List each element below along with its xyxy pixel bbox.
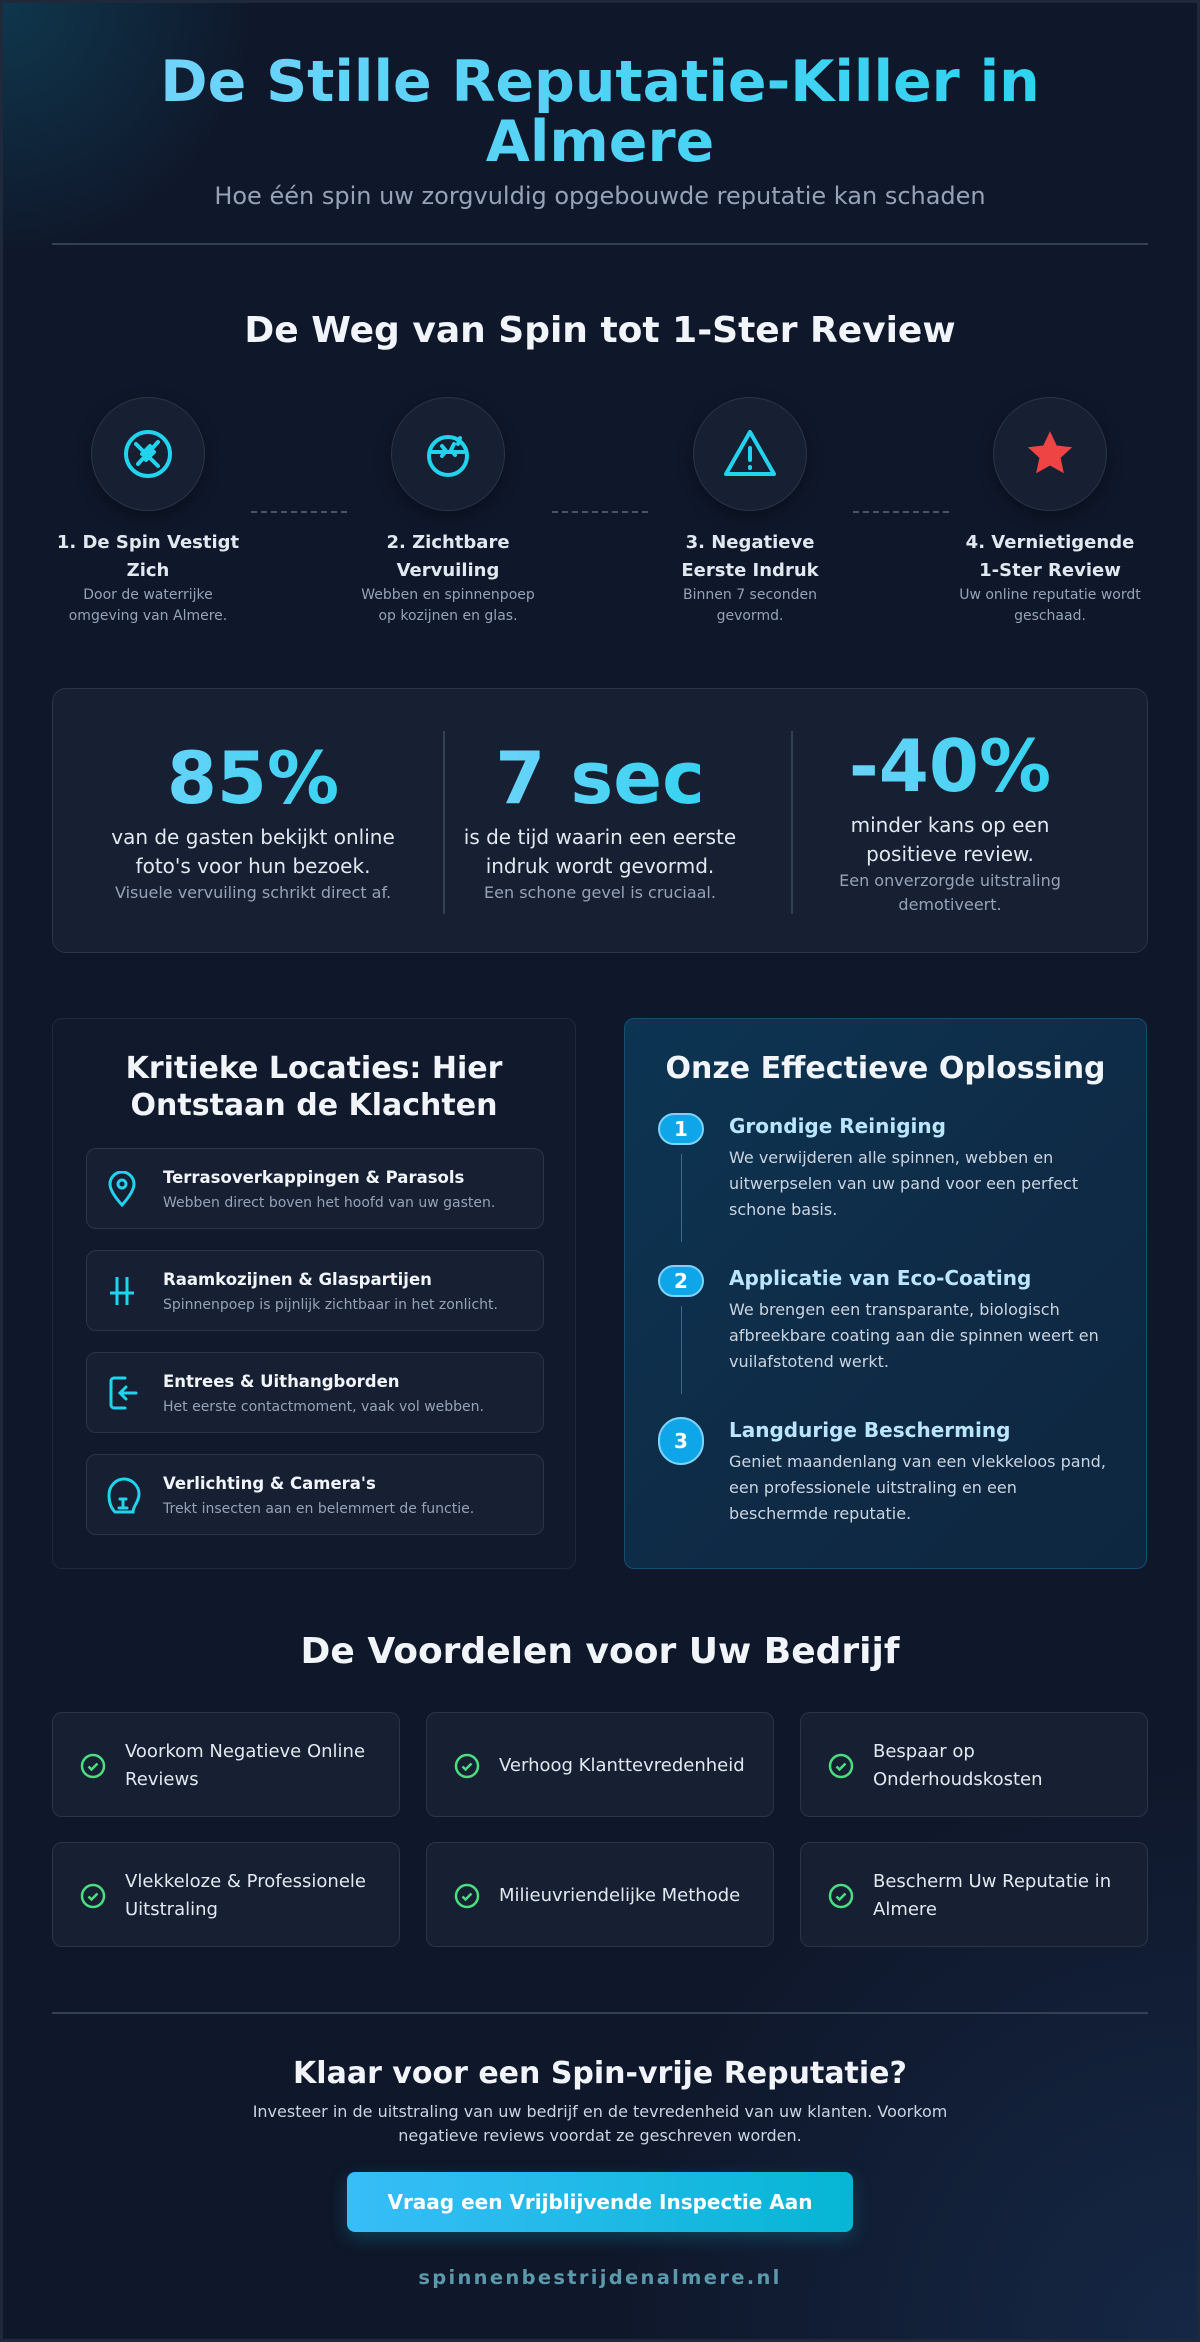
process steps <box>57 397 1141 624</box>
title: De Stille Reputatie-Killer in <box>160 49 1040 115</box>
step: coating <box>658 1265 1099 1371</box>
icon: warning <box>693 397 807 511</box>
item: lighting: Verlichting & Camera's <box>163 1474 376 1493</box>
item: terrace: Terrasoverkappingen & Parasols <box>163 1168 464 1187</box>
heading: locations: Kritieke Locaties: Hier <box>126 1051 502 1086</box>
stat -40% <box>839 724 1061 914</box>
step: cleaning <box>658 1113 1078 1219</box>
arrow: connector 2 <box>552 511 648 513</box>
benefit 4: Vlekkeloze & Professionele Uitstraling <box>125 1870 366 1920</box>
panel: solution <box>624 1018 1147 1569</box>
benefit 3 <box>800 1712 1148 1817</box>
benefit 2 <box>426 1712 774 1817</box>
title <box>0 52 1200 172</box>
stat 7 sec: Een schone gevel is cruciaal. <box>484 883 716 902</box>
panel: statistics <box>52 688 1148 953</box>
benefit 6 <box>800 1842 1148 1947</box>
stat 85%: 85% <box>167 736 339 820</box>
item: terrace: Webben direct boven het hoofd van uw gasten. <box>163 1195 495 1211</box>
stat 7 sec: is de tijd waarin een eerste indruk wordt gevormd. <box>464 825 736 878</box>
icon: star <box>993 397 1107 511</box>
CTA button <box>347 2172 853 2232</box>
benefit 4 <box>52 1842 400 1947</box>
item: windows: Raamkozijnen & Glaspartijen <box>163 1270 432 1289</box>
heading: benefits: De Voordelen voor Uw Bedrijf <box>300 1631 900 1672</box>
item: entrances: Het eerste contactmoment, vaak vol webben. <box>163 1399 484 1415</box>
step: coating: 2 <box>674 1269 688 1293</box>
item: lighting <box>86 1454 544 1535</box>
item: terrace <box>86 1148 544 1229</box>
stat -40%: minder kans op een positieve review. <box>851 813 1049 866</box>
step: cleaning: We verwijderen alle spinnen, webben en uitwerpselen van uw pand voor een perfect schone basis. <box>729 1148 1078 1219</box>
benefit 5 <box>426 1842 774 1947</box>
stat 85%: Visuele vervuiling schrikt direct af. <box>115 883 391 902</box>
benefit 1 <box>52 1712 400 1817</box>
title: Almere <box>486 109 714 175</box>
step 4 <box>959 397 1141 624</box>
stat 7 sec: 7 sec <box>495 736 705 820</box>
step: protection: 3 <box>674 1429 688 1453</box>
subtitle: Hoe één spin uw zorgvuldig opgebouwde reputatie kan schaden <box>214 182 986 210</box>
footer url: spinnenbestrijdenalmere.nl <box>418 2266 782 2289</box>
benefit 1: Voorkom Negatieve Online Reviews <box>125 1740 365 1790</box>
item: windows <box>86 1250 544 1331</box>
item: entrances: Entrees & Uithangborden <box>163 1372 400 1391</box>
heading: locations: Ontstaan de Klachten <box>131 1088 497 1123</box>
heading: solution: Onze Effectieve Oplossing <box>665 1051 1106 1086</box>
stat 7 sec <box>464 736 736 902</box>
step 4: 4. Vernietigende 1-Ster Review <box>966 532 1134 581</box>
step: protection: Geniet maandenlang van een vlekkeloos pand, een professionele uitstraling en een beschermde reputatie. <box>729 1452 1106 1523</box>
CTA text: Investeer in de uitstraling van uw bedrijf en de tevredenheid van uw klanten. Voorkom negatieve reviews voordat ze geschreven worden. <box>253 2102 947 2145</box>
step: cleaning: 1 <box>674 1117 688 1141</box>
benefit 2: Verhoog Klanttevredenheid <box>499 1754 745 1776</box>
step: protection <box>658 1417 1106 1523</box>
icon: web <box>391 397 505 511</box>
benefit 5: Milieuvriendelijke Methode <box>499 1884 740 1906</box>
stat -40%: Een onverzorgde uitstraling demotiveert. <box>839 871 1061 914</box>
step 4: Uw online reputatie wordt geschaad. <box>959 587 1141 624</box>
step: coating: Applicatie van Eco-Coating <box>729 1266 1031 1290</box>
step: coating: We brengen een transparante, biologisch afbreekbare coating aan die spinnen weert en vuilafstotend werkt. <box>729 1300 1099 1371</box>
step 1: Door de waterrijke omgeving van Almere. <box>69 587 227 624</box>
step 2 <box>361 397 535 624</box>
item: entrances <box>86 1352 544 1433</box>
stat 85%: van de gasten bekijkt online foto's voor hun bezoek. <box>111 825 395 878</box>
step 3 <box>681 397 819 624</box>
item: lighting: Trekt insecten aan en belemmert de functie. <box>163 1501 474 1517</box>
step 2: Webben en spinnenpoep op kozijnen en glas. <box>361 587 535 624</box>
icon: spider cross <box>91 397 205 511</box>
arrow: connector 3 <box>853 511 949 513</box>
step: protection: Langdurige Bescherming <box>729 1418 1010 1442</box>
benefits grid <box>52 1712 1148 1947</box>
CTA heading: Klaar voor een Spin-vrije Reputatie? <box>293 2056 907 2091</box>
step 1: 1. De Spin Vestigt Zich <box>57 532 239 581</box>
heading: process: De Weg van Spin tot 1-Ster Review <box>244 310 956 351</box>
stat -40%: -40% <box>849 724 1051 808</box>
benefit 3: Bespaar op Onderhoudskosten <box>873 1740 1043 1790</box>
stat 85% <box>111 736 395 902</box>
arrow: connector 1 <box>251 511 347 513</box>
heading: locations <box>126 1051 502 1123</box>
CTA button: Vraag een Vrijblijvende Inspectie Aan <box>387 2190 813 2214</box>
item: windows: Spinnenpoep is pijnlijk zichtbaar in het zonlicht. <box>163 1297 498 1313</box>
step 2: 2. Zichtbare Vervuiling <box>386 532 510 581</box>
step 1 <box>57 397 239 624</box>
step 3: Binnen 7 seconden gevormd. <box>683 587 817 624</box>
panel: critical locations <box>52 1018 576 1569</box>
step: cleaning: Grondige Reiniging <box>729 1114 946 1138</box>
benefit 6: Bescherm Uw Reputatie in Almere <box>873 1870 1111 1920</box>
step 3: 3. Negatieve Eerste Indruk <box>681 532 819 581</box>
